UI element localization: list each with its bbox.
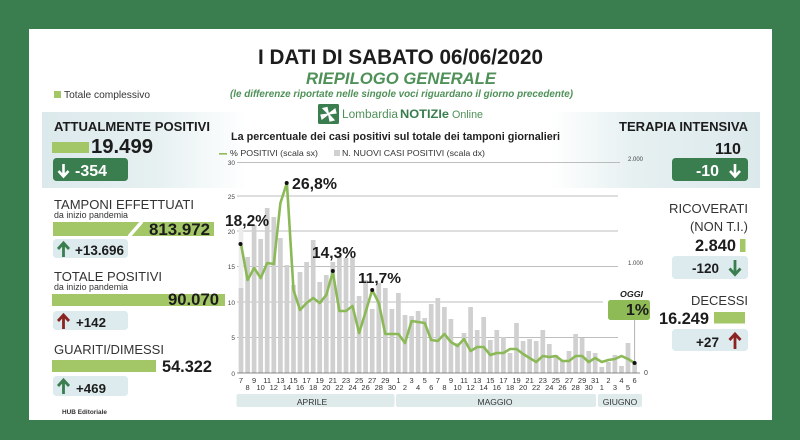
date labels: 8 [442,383,446,392]
date labels: 18 [506,383,514,392]
date labels: 19 [512,376,521,385]
stat: totale positivi: TOTALE POSITIVI [54,269,162,284]
axis labels right: 2.000 [628,157,644,163]
stat: terapia intensiva: 110 [715,141,741,158]
logo: Lombardia Notizie Online: Online [452,109,483,121]
axis labels left: 10 [228,300,235,307]
date labels: 21 [525,376,534,385]
date labels: 29 [578,376,586,385]
date labels: 16 [296,383,304,392]
credit: HUB Editoriale [62,410,108,416]
panel: top-left highlight [42,112,247,188]
date labels: 28 [571,383,580,392]
date labels: 31 [591,376,599,385]
stat: terapia intensiva: TERAPIA INTENSIVA [619,119,749,134]
today guide line [634,320,636,363]
chart legend: N. NUOVI CASI POSITIVI (scala dx) [342,148,485,158]
callout: 26,8%: 26,8% [292,176,337,193]
axis labels right: 0 [644,370,648,377]
axis labels left: 20 [228,229,235,236]
stat: terapia intensiva: -10 [696,163,719,180]
month band: aprile: APRILE [297,397,327,407]
note: (le differenze riportate nelle singole voci riguardano il giorno precedente) [230,89,574,100]
date labels: 28 [375,383,383,392]
date labels: 8 [246,383,250,392]
date labels: 15 [289,376,298,385]
callout: today: OGGI [620,290,644,299]
date labels: 23 [539,376,547,385]
date labels: 10 [453,383,462,392]
date labels: 22 [532,383,540,392]
stat: ricoverati: 2.840 [695,237,736,255]
date labels: 29 [381,376,389,385]
stat: tamponi effettuati: 813.972 [149,220,210,239]
stat: decessi: 16.249 [659,310,709,328]
axis labels left [228,160,235,378]
date labels: 26 [558,383,567,392]
date labels: 1 [396,376,400,385]
date labels: 24 [545,383,553,392]
date labels: 4 [619,376,624,385]
callout: today: 1% [626,302,649,319]
stat: ricoverati [669,201,748,279]
date labels: 25 [552,376,560,385]
date labels: 2 [606,376,610,385]
date labels: 14 [283,383,291,392]
date labels: 27 [368,376,376,385]
percentage line [241,183,635,363]
date labels: 15 [486,376,494,385]
stat: ricoverati: RICOVERATI [669,201,748,216]
stat: ricoverati: (NON T.I.) [690,219,748,234]
date labels: 20 [322,383,330,392]
date labels: 6 [633,376,637,385]
chart: positive percentage and new cases [228,157,648,378]
subtitle: RIEPILOGO GENERALE [306,69,497,88]
stat: tamponi effettuati [53,197,214,258]
month band: giugno: GIUGNO [603,397,638,407]
chart legend [219,148,485,158]
stat: tamponi effettuati: TAMPONI EFFETTUATI [54,197,194,212]
axis labels left: 25 [228,194,235,201]
callout: today [608,290,650,320]
callout: 14,3%: 14,3% [312,245,356,262]
date labels: 9 [252,376,256,385]
stat: guariti/dimessi: +469 [76,381,106,396]
stat: decessi [659,293,748,351]
stat: totale positivi: +142 [76,315,106,330]
title: I DATI DI SABATO 06/06/2020 [258,46,543,69]
date labels: 17 [302,376,311,385]
stat: tamponi effettuati: da inizio pandemia [54,210,128,220]
chart legend: % POSITIVI (scala sx) [230,148,318,158]
axis labels right: 1.000 [628,261,644,267]
date labels: 13 [473,376,481,385]
date labels: 14 [480,383,488,392]
legend: totale complessivo: Totale complessivo [64,90,150,101]
date labels: 7 [239,376,243,385]
date labels: 30 [388,383,396,392]
logo: Lombardia Notizie Online [318,104,483,124]
callout: 11,7%: 11,7% [358,270,401,287]
date labels: 18 [309,383,317,392]
date labels: 25 [355,376,363,385]
callout: 18,2%: 18,2% [225,213,269,230]
stat: attualmente positivi [52,119,210,181]
date labels: 3 [410,376,414,385]
date labels: 17 [499,376,508,385]
stat: guariti/dimessi: 54.322 [162,358,212,376]
stat: guariti/dimessi [52,342,212,396]
date labels: 20 [519,383,527,392]
month band: maggio: MAGGIO [478,397,513,407]
date labels: 10 [257,383,265,392]
axis labels right [628,157,648,377]
date labels: 6 [429,383,433,392]
stat: totale positivi [52,269,225,330]
date labels: 5 [626,383,630,392]
date labels: 30 [585,383,593,392]
date labels: 13 [276,376,285,385]
stat: tamponi effettuati: +13.696 [75,243,124,258]
date labels: 21 [329,376,337,385]
stat: terapia intensiva [619,119,749,181]
date labels [239,376,637,392]
axis labels left: 15 [228,264,235,271]
logo: Lombardia Notizie Online: NOTIZIe [400,107,449,121]
stat: attualmente positivi: ATTUALMENTE POSITIVI [54,119,210,134]
date labels: 1 [600,383,604,392]
axis [237,372,640,374]
callout dots [238,181,637,365]
stat: totale positivi: 90.070 [168,290,219,309]
axis labels left: 30 [228,160,235,167]
axis labels left: 5 [231,335,235,342]
date labels: 11 [263,376,271,385]
axis labels left: 0 [231,371,235,378]
new cases bars [241,208,635,373]
month band: aprile [236,394,394,407]
stat: guariti/dimessi: GUARITI/DIMESSI [54,342,164,357]
month band: giugno [598,394,642,407]
panel: top-right highlight [550,112,760,188]
date labels: 24 [348,383,357,392]
stat: ricoverati: -120 [692,261,719,276]
date labels: 16 [493,383,501,392]
date labels: 12 [270,383,278,392]
date labels: 7 [436,376,440,385]
first pale bar [239,228,243,288]
date labels: 12 [466,383,475,392]
date labels: 22 [335,383,344,392]
chart heading: La percentuale dei casi positivi sul totale dei tamponi giornalieri [231,131,560,143]
stat: totale positivi: da inizio pandemia [54,282,128,292]
date labels: 11 [460,376,468,385]
date labels: 23 [342,376,350,385]
month band: maggio [396,394,596,407]
date labels: 3 [613,383,617,392]
date labels: 27 [565,376,573,385]
stat: attualmente positivi: -354 [75,163,107,180]
stat: decessi: +27 [696,335,719,350]
logo: Lombardia Notizie Online: Lombardia [342,109,399,121]
date labels: 26 [361,383,370,392]
date labels: 9 [449,376,453,385]
date labels: 19 [316,376,324,385]
stat: decessi: DECESSI [691,293,748,308]
date labels: 4 [416,383,420,392]
date labels: 2 [403,383,407,392]
stat: attualmente positivi: 19.499 [91,136,153,158]
date labels: 5 [423,376,427,385]
